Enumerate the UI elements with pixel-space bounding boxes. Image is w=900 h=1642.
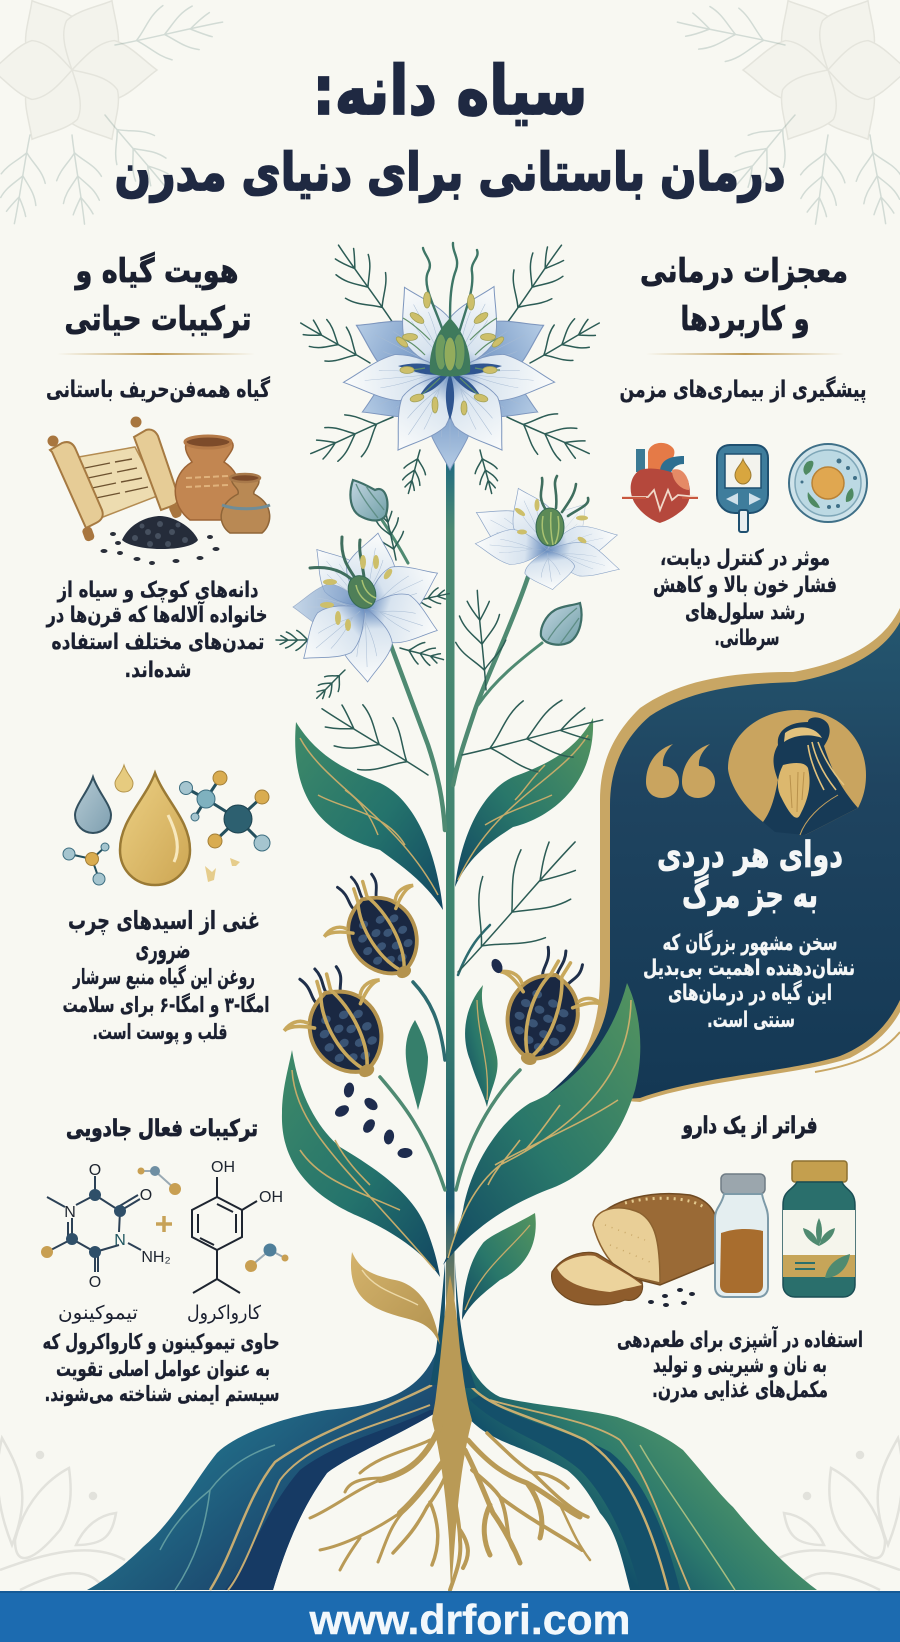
decoration: top-right watermark flower [671,0,900,227]
leaf: small centre left [406,1020,428,1110]
icon: heart [622,443,698,523]
loose seeds [333,957,505,1159]
icon: bread, spice jar and supplement bottle [552,1161,855,1307]
icon: quote marks [646,744,715,798]
chart: thymoquinone structure: N [64,1204,76,1221]
panel: quote callout [535,608,900,1105]
flower: left bloom [287,529,448,683]
panel: ancient plant [46,376,270,683]
main stem [446,462,454,1322]
flower: large top bloom [341,243,557,470]
panel: right heading: و کاربردها [680,299,810,339]
title: سیاه دانه: [312,52,588,131]
leaf: lower right [443,983,640,1265]
panel: right heading: معجزات درمانی [640,251,848,291]
panel: beyond a medicine: فراتر از یک دارو [682,1113,818,1139]
panel: left heading [57,251,255,355]
icon: sage portrait [728,710,866,835]
panel: essential fatty acids: قلب و پوست است. [92,1020,228,1044]
panel: chronic disease prevention: موثر در کنترل دیابت، [660,546,830,571]
leaf: small centre right [465,985,498,1107]
seed pods [265,852,615,1101]
panel: ancient plant: شده‌اند. [124,658,192,683]
leaf: upper right [455,718,593,887]
title [114,52,786,203]
panel: essential fatty acids [62,765,270,1044]
leaf: small low right [462,1213,536,1320]
chart: thymoquinone structure: O [140,1187,152,1204]
panel: chronic disease prevention: فشار خون بالا و کاهش [653,573,837,598]
panel: beyond a medicine [552,1113,863,1403]
flower buds [350,480,582,645]
decoration: top-left watermark flower [0,0,228,228]
panel: active compounds: حاوی تیموکینون و کارواکرول که [42,1330,280,1354]
decoration: bottom-right watermark leaves [775,1438,900,1590]
chart: carvacrol structure: OH [211,1159,235,1176]
flower: right bloom [467,476,624,593]
panel: left heading: ترکیبات حیاتی [64,299,252,339]
plant illustration [87,231,817,1592]
icon: plus and atoms [138,1166,288,1272]
icon: cell dish [789,444,867,522]
panel: essential fatty acids: ضروری [136,935,190,965]
chart: thymoquinone structure: NH₂ [141,1249,171,1266]
panel: left heading: هویت گیاه و [74,251,238,291]
panel: quote callout: این گیاه در درمان‌های [668,979,832,1006]
panel: essential fatty acids: روغن این گیاه منبع سرشار [72,964,255,989]
panel: active compounds [41,1116,288,1406]
chart: thymoquinone structure [41,1162,171,1291]
chart: thymoquinone structure: N [114,1232,126,1249]
footer banner [0,1591,900,1642]
panel: active compounds: تیموکینون [58,1302,138,1324]
root sweep right [455,1310,817,1590]
chart: thymoquinone structure: O [89,1274,101,1291]
panel: active compounds: ترکیبات فعال جادویی [66,1116,258,1142]
panel: chronic disease prevention: سرطانی. [714,626,780,651]
footer banner: www.drfori.com [308,1596,630,1642]
icon: oil drops and molecules [63,765,270,885]
panel: quote callout: سنتی است. [707,1008,795,1033]
panel: ancient plant: خانواده آلاله‌ها که قرن‌ها در [46,600,267,628]
decoration: bottom-left watermark leaves [0,1438,125,1590]
panel: ancient plant: دانه‌های کوچک و سیاه از [57,578,259,603]
icon: scroll, pots and seeds [48,416,270,565]
panel: quote callout: دوای هر دردی [657,835,843,876]
panel: beyond a medicine: مکمل‌های غذایی مدرن. [652,1378,828,1403]
leaf: gold [351,1252,440,1345]
panel: right heading [640,251,848,355]
panel: ancient plant: گیاه همه‌فن‌حریف باستانی [46,376,270,403]
panel: essential fatty acids: امگا-۳ و امگا-۶ برای سلامت [62,992,270,1017]
leaf: upper left [295,722,443,910]
panel: ancient plant: تمدن‌های مختلف استفاده [52,630,264,655]
branch stems [380,520,542,1190]
fronds [276,231,611,1000]
panel: chronic disease prevention: رشد سلول‌های [685,600,805,625]
taproot and root branches [310,1262,590,1592]
chart: carvacrol structure: OH [259,1189,283,1206]
panel: active compounds: کارواکرول [187,1302,262,1324]
panel: active compounds: سیستم ایمنی شناخته می‌شوند. [44,1382,280,1406]
panel: essential fatty acids: غنی از اسیدهای چرب [68,906,260,936]
panel: quote callout: به جز مرگ [682,873,818,916]
leaf: lower left [282,1050,440,1277]
icon: glucose meter [717,445,768,532]
panel: active compounds: به عنوان عوامل اصلی تقویت [56,1357,270,1381]
root sweep left [87,1340,440,1590]
chart: carvacrol structure [192,1159,283,1293]
chart: thymoquinone structure: O [89,1162,101,1179]
panel: chronic disease prevention [620,376,867,651]
